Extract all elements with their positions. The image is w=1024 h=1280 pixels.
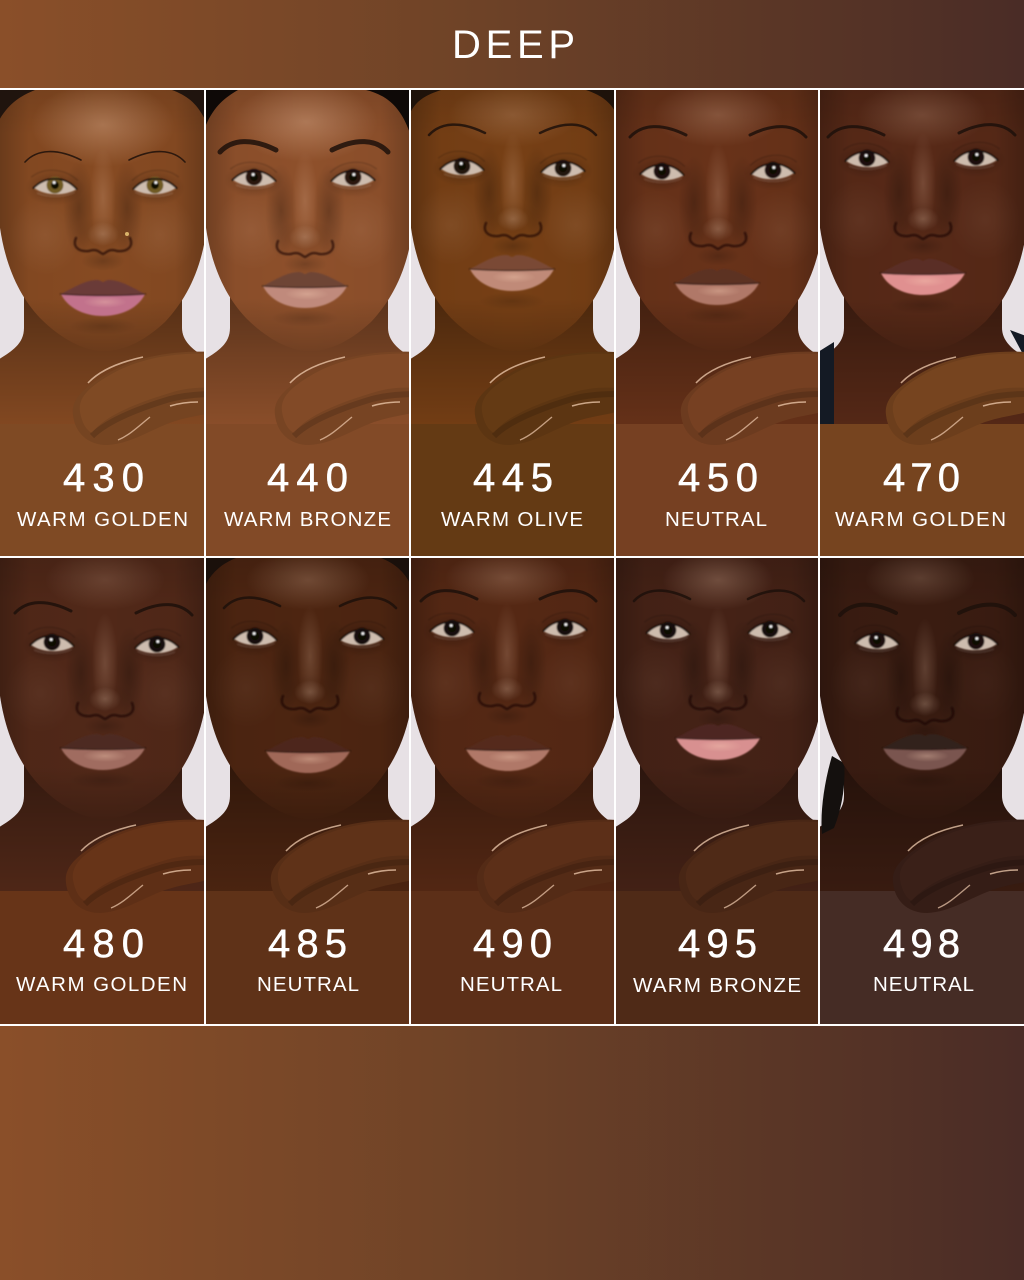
panel: shade 450 [611, 83, 825, 556]
shade swatch colour block 498 [820, 891, 1024, 1024]
panel: shade 480 [0, 550, 209, 1024]
shade swatch colour block 490 [411, 891, 615, 1024]
panel: shade 495 [611, 550, 825, 1024]
product smear 470 [886, 352, 1024, 445]
shade swatch colour block 450 [616, 424, 820, 556]
shade swatch colour block 480 [0, 891, 204, 1024]
product smear 490 [477, 820, 618, 913]
product smear 480 [66, 820, 207, 913]
panel: shade 440 [201, 82, 416, 556]
shade number 450: 450 [678, 456, 758, 500]
shade number 430: 430 [63, 456, 144, 500]
product smear 495 [679, 820, 820, 913]
product smear 485 [271, 820, 412, 913]
portrait 470 [815, 83, 1024, 430]
portrait 430 [0, 83, 209, 430]
shade number 495: 495 [678, 922, 757, 966]
shade name 485: NEUTRAL [257, 973, 359, 996]
header band [0, 0, 1024, 88]
product smear 450 [681, 352, 822, 445]
shade number 440: 440 [267, 456, 348, 500]
portrait 485 [201, 550, 415, 898]
shade swatch colour block 445 [411, 424, 615, 556]
shade number 485: 485 [268, 922, 347, 966]
title: DEEP [452, 23, 575, 67]
shade name 498: NEUTRAL [873, 973, 974, 996]
shade name 470: WARM GOLDEN [835, 508, 1006, 531]
shade swatch colour block 485 [206, 891, 410, 1024]
shade swatch colour block 495 [616, 891, 820, 1024]
product smear 498 [893, 820, 1024, 913]
bottom gradient band [0, 1026, 1024, 1280]
shade name 450: NEUTRAL [665, 508, 767, 531]
product smear 445 [475, 352, 616, 445]
shade name 490: NEUTRAL [460, 973, 562, 996]
product smear 440 [275, 352, 416, 445]
panel: shade 490 [406, 550, 620, 1024]
shade number 480: 480 [63, 922, 144, 966]
shade number 445: 445 [473, 456, 553, 500]
shade name 445: WARM OLIVE [441, 508, 583, 531]
panel: shade 498 [815, 550, 1024, 1024]
portrait 480 [0, 550, 209, 898]
shade name 440: WARM BRONZE [224, 508, 391, 531]
portrait 498 [815, 550, 1024, 898]
panel: shade 485 [201, 550, 415, 1024]
panel: shade 470 [815, 83, 1024, 556]
shade name 495: WARM BRONZE [633, 974, 801, 997]
shade swatch colour block 440 [206, 424, 410, 556]
product smear 430 [73, 352, 214, 445]
shade swatch colour block 430 [0, 424, 204, 556]
shade number 498: 498 [883, 922, 960, 966]
panel: shade 430 [0, 83, 214, 556]
shade name 430: WARM GOLDEN [17, 508, 188, 531]
portrait 490 [406, 550, 620, 898]
portrait 445 [406, 83, 620, 430]
portrait 450 [611, 83, 825, 430]
portrait 440 [201, 82, 415, 430]
shade number 490: 490 [473, 922, 552, 966]
shade number 470: 470 [883, 456, 960, 500]
shade name 480: WARM GOLDEN [16, 973, 187, 996]
portrait 495 [611, 550, 825, 898]
shade swatch colour block 470 [820, 424, 1024, 556]
panel: shade 445 [406, 83, 620, 556]
